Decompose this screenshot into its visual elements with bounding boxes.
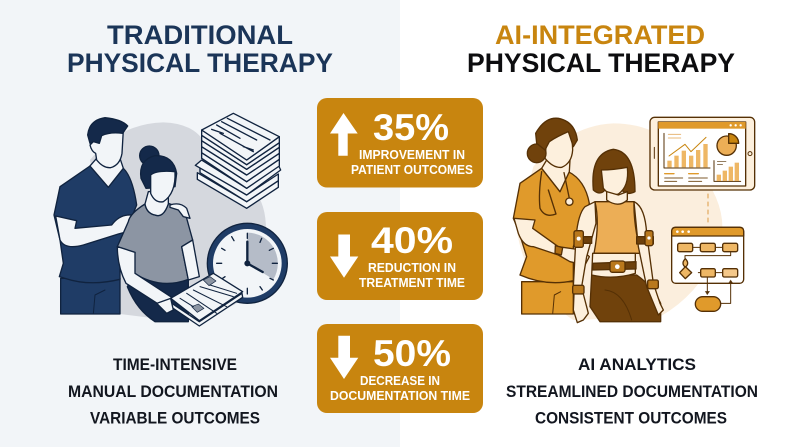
stat card: 40% reduction in treatment time [317, 212, 483, 300]
stat card: 40% reduction in treatment time: REDUCTION IN [368, 261, 456, 275]
icon: stethoscope [539, 172, 569, 215]
icon: up arrow [330, 113, 358, 156]
stat card: 50% decrease in documentation time: 50% [373, 333, 451, 374]
title: traditional physical therapy: TRADITIONAL [107, 20, 293, 50]
title: traditional physical therapy: PHYSICAL THERAPY [67, 48, 333, 78]
title: AI-integrated physical therapy: AI-INTEGRATED [495, 20, 705, 50]
stat card: 50% decrease in documentation time: DOCUMENTATION TIME [330, 389, 470, 403]
list: AI-integrated benefits: CONSISTENT OUTCOMES [535, 410, 727, 428]
stat card: 35% improvement in patient outcomes: IMPROVEMENT IN [359, 148, 465, 162]
stat card: 50% decrease in documentation time: DECREASE IN [360, 374, 440, 388]
list: AI-integrated benefits: STREAMLINED DOCUMENTATION [506, 383, 758, 401]
list: AI-integrated benefits [506, 356, 758, 428]
list: AI-integrated benefits: AI ANALYTICS [578, 356, 696, 374]
patient seated with documents [117, 146, 199, 322]
illustration: AI-integrated therapy scene [513, 117, 755, 323]
title: AI-integrated physical therapy [467, 20, 735, 78]
icon: tablet analytics dashboard [650, 117, 755, 190]
icon: down arrow [330, 234, 358, 278]
list: traditional drawbacks: TIME-INTENSIVE [113, 356, 237, 374]
stat card: 50% decrease in documentation time [317, 324, 483, 413]
list: traditional drawbacks: VARIABLE OUTCOMES [90, 410, 260, 428]
list: traditional drawbacks: MANUAL DOCUMENTATION [68, 383, 278, 401]
stat card: 35% improvement in patient outcomes [317, 98, 483, 188]
icon: down arrow [330, 336, 358, 379]
background blob [517, 123, 722, 320]
icon: documents in hands [157, 273, 243, 326]
icon: paper stack [195, 113, 281, 208]
stat card: 40% reduction in treatment time: TREATMENT TIME [359, 276, 465, 290]
dashed connector [706, 194, 709, 223]
stat card: 35% improvement in patient outcomes: 35% [373, 107, 449, 148]
background blob [90, 122, 266, 321]
stat card: 35% improvement in patient outcomes: PATIENT OUTCOMES [351, 163, 473, 177]
icon: workflow window and flowchart [672, 227, 744, 311]
patient with wearable sensors [573, 149, 663, 323]
title: AI-integrated physical therapy: PHYSICAL THERAPY [467, 48, 735, 78]
man: therapist [54, 118, 137, 314]
title: traditional physical therapy [67, 20, 333, 78]
list: traditional drawbacks [68, 356, 278, 428]
nurse therapist [513, 118, 589, 314]
stat card: 40% reduction in treatment time: 40% [371, 220, 453, 261]
icon: wall clock [207, 223, 287, 303]
illustration: traditional therapy scene [54, 113, 287, 326]
